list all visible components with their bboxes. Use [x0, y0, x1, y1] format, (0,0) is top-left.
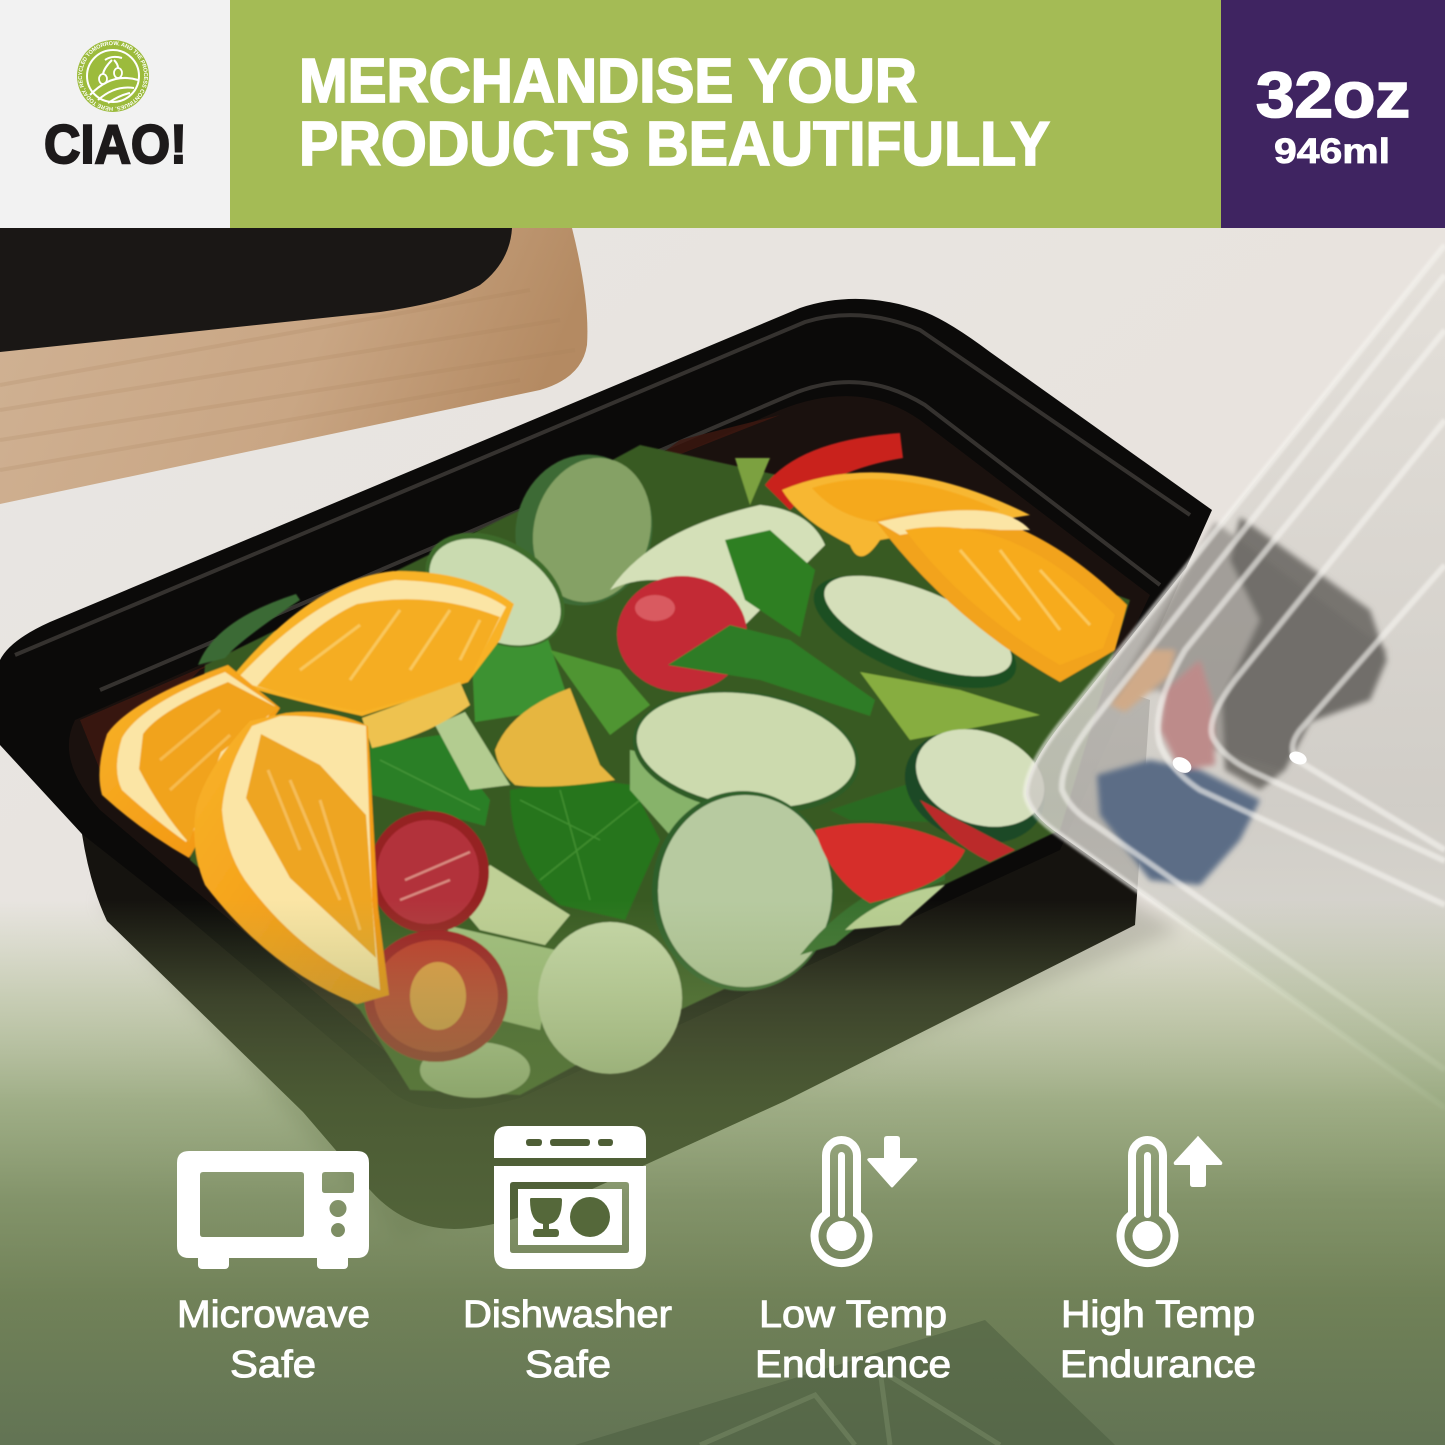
feature: high temp endurance	[1060, 1136, 1256, 1386]
interior reflection	[80, 415, 780, 770]
orange slice left	[99, 665, 280, 858]
salad base greens	[190, 445, 1130, 1095]
icon: dishwasher	[494, 1126, 646, 1269]
title line one: MERCHANDISE YOUR	[299, 47, 917, 116]
wooden board	[0, 228, 587, 504]
label: high temp endurance: High Temp	[1061, 1294, 1255, 1336]
orange slices	[99, 472, 1127, 1004]
cucumber slices	[405, 439, 1061, 1098]
feature: microwave safe	[177, 1151, 370, 1386]
top lettuce pieces	[668, 530, 875, 716]
feature: dishwasher safe	[463, 1126, 672, 1386]
orange slice back	[228, 571, 514, 716]
orange slice top	[782, 472, 1030, 556]
capacity ounces: 32oz	[1256, 59, 1410, 131]
label: low temp endurance: Endurance	[755, 1344, 951, 1386]
lid highlights	[1170, 749, 1309, 776]
dark tray on board	[0, 228, 512, 352]
icon: microwave	[177, 1151, 369, 1269]
clear lid	[1026, 245, 1445, 1108]
rim highlight	[15, 315, 1190, 690]
label: microwave safe: Microwave	[177, 1294, 370, 1336]
tomatoes	[364, 433, 1015, 1062]
orange slice front	[194, 712, 389, 1004]
interior wall	[69, 396, 1150, 1089]
container body	[0, 500, 1150, 1229]
container shadow	[100, 880, 1180, 1240]
icon: thermometer with down arrow	[814, 1136, 917, 1263]
lid edge lines	[1026, 245, 1445, 1108]
food	[99, 433, 1130, 1098]
capacity millilitres: 946ml	[1274, 132, 1390, 171]
orange wedge piece	[362, 682, 470, 748]
icon: thermometer with up arrow	[1120, 1136, 1222, 1263]
title panel	[230, 0, 1221, 228]
logo wordmark: CIAO!	[44, 113, 187, 175]
logo badge: HERE TODAY, RECYCLED TOMORROW. AND THE PROCESS CONTINUES.	[78, 41, 148, 111]
back cucumber slice	[198, 594, 300, 665]
orange slice right	[875, 510, 1127, 682]
feature: low temp endurance	[755, 1136, 951, 1386]
label: dishwasher safe: Dishwasher	[463, 1294, 672, 1336]
header band: title	[230, 0, 1221, 228]
capacity panel	[1221, 0, 1445, 228]
header band: capacity	[1221, 0, 1445, 228]
label: low temp endurance: Low Temp	[759, 1294, 947, 1336]
label: high temp endurance: Endurance	[1060, 1344, 1256, 1386]
container rim	[0, 299, 1212, 1109]
header band: logo	[0, 0, 230, 228]
title line two: PRODUCTS BEAUTIFULLY	[299, 110, 1050, 179]
bottom green gradient	[0, 900, 1445, 1445]
lid outer shape	[1026, 245, 1445, 1108]
lettuce pieces	[370, 458, 1040, 1030]
lid see-through reflections	[1097, 517, 1387, 885]
label: dishwasher safe: Safe	[525, 1344, 611, 1386]
label: microwave safe: Safe	[230, 1344, 316, 1386]
logo panel	[0, 0, 230, 228]
placemat at bottom	[575, 1320, 1115, 1445]
